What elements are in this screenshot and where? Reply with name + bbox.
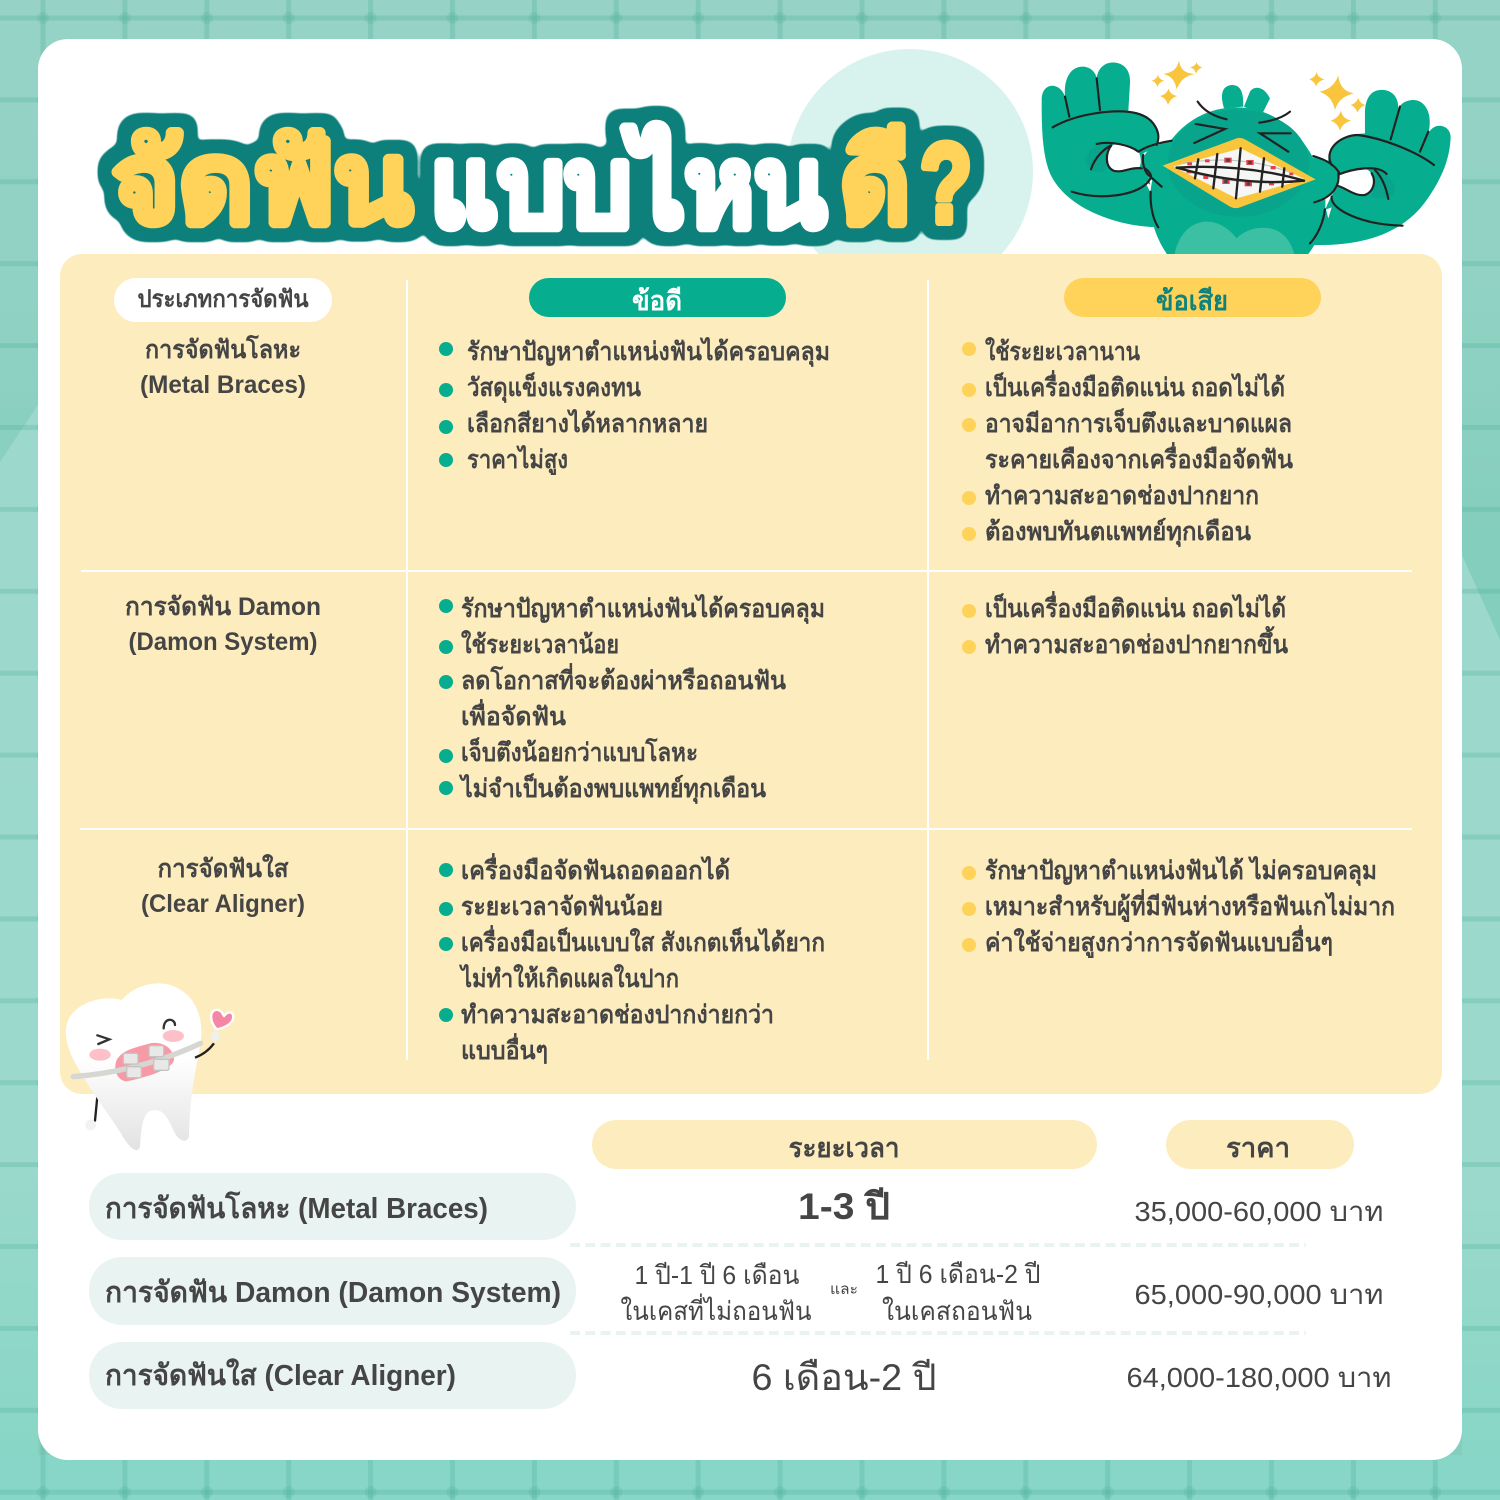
pros list: clear aligner: แบบอื่นๆ xyxy=(461,1033,548,1065)
duration: damon: และ xyxy=(830,1281,858,1298)
header: duration xyxy=(592,1120,1097,1169)
title xyxy=(112,121,972,250)
row label: clear aligner: (Clear Aligner) xyxy=(141,890,305,918)
cons list: metal: ระคายเคืองจากเครื่องมือจัดฟัน xyxy=(985,442,1293,474)
pros list: clear aligner: ทำความสะอาดช่องปากง่ายกว่า xyxy=(461,1001,774,1029)
title: ? xyxy=(920,121,972,246)
row pill: damon xyxy=(89,1257,576,1325)
row label: damon xyxy=(125,593,321,656)
pros list: metal: รักษาปัญหาตำแหน่งฟันได้ครอบคลุม xyxy=(467,336,830,368)
eyes xyxy=(1053,78,1434,243)
pros list: damon: ใช้ระยะเวลาน้อย xyxy=(461,629,619,659)
top knot xyxy=(1222,85,1243,108)
header: type of braces xyxy=(114,278,332,322)
pros list: damon xyxy=(439,593,825,805)
row label: metal braces: (Metal Braces) xyxy=(140,371,306,399)
body xyxy=(1150,107,1325,258)
title: จัดฟัน xyxy=(112,121,412,246)
cons list: metal: อาจมีอาการเจ็บตึงและบาดแผล xyxy=(985,408,1292,438)
row label: clear aligner xyxy=(141,853,305,918)
row label: metal braces: การจัดฟันโลหะ xyxy=(145,334,301,364)
cons list: damon: ทำความสะอาดช่องปากยากขึ้น xyxy=(985,625,1288,659)
hand shadows xyxy=(1085,143,1108,172)
pros list: damon: เจ็บตึงน้อยกว่าแบบโลหะ xyxy=(461,737,698,767)
row label: damon: (Damon System) xyxy=(128,628,318,656)
row label: metal braces xyxy=(140,334,306,399)
decorative circle behind title xyxy=(787,49,1033,295)
cons list: clear aligner: รักษาปัญหาตำแหน่งฟันได้ ไม่ครอบคลุม xyxy=(985,855,1377,887)
cons list: metal: ต้องพบทันตแพทย์ทุกเดือน xyxy=(985,517,1251,548)
row label: damon: การจัดฟัน Damon xyxy=(125,593,321,621)
row label: clear aligner: การจัดฟันใส xyxy=(158,853,289,883)
cons list: damon xyxy=(962,591,1288,659)
row pill: damon: การจัดฟัน Damon (Damon System) xyxy=(105,1277,561,1309)
right hand xyxy=(1310,90,1451,245)
header: price xyxy=(1166,1120,1354,1169)
header: cons xyxy=(1064,278,1321,317)
price: damon: 65,000-90,000 บาท xyxy=(1134,1279,1384,1310)
pros list: metal: ราคาไม่สูง xyxy=(467,444,568,476)
pros list: metal xyxy=(439,336,830,476)
duration: damon xyxy=(620,1259,1040,1326)
pros list: damon: ลดโอกาสที่จะต้องผ่าหรือถอนฟัน xyxy=(461,663,786,695)
cons list: clear aligner: เหมาะสำหรับผู้ที่มีฟันห่างหรือฟันเกไม่มาก xyxy=(985,889,1395,923)
sparkles xyxy=(1151,61,1365,131)
face shade xyxy=(1168,110,1309,217)
header: pros: ข้อดี xyxy=(632,286,682,316)
cons list: damon: เป็นเครื่องมือติดแน่น ถอดไม่ได้ xyxy=(985,591,1286,623)
duration: damon: ในเคสที่ไม่ถอนฟัน xyxy=(620,1293,812,1326)
hand outlines right xyxy=(1329,135,1434,165)
duration: damon: 1 ปี 6 เดือน-2 ปี xyxy=(876,1259,1040,1289)
illustration: tooth mascot xyxy=(66,983,233,1150)
pros list: clear aligner: ระยะเวลาจัดฟันน้อย xyxy=(461,893,663,921)
pros list: clear aligner: เครื่องมือเป็นแบบใส สังเกตเห็นได้ยาก xyxy=(461,925,825,957)
cons list: metal xyxy=(962,336,1293,548)
header: pros xyxy=(529,278,786,317)
price: clear: 64,000-180,000 บาท xyxy=(1126,1362,1392,1393)
pros list: clear aligner xyxy=(439,853,825,1065)
row pill: clear: การจัดฟันใส (Clear Aligner) xyxy=(105,1358,456,1392)
cons list: metal: ใช้ระยะเวลานาน xyxy=(985,336,1140,366)
pros list: metal: วัสดุแข็งแรงคงทน xyxy=(467,372,641,404)
pros list: damon: ไม่จำเป็นต้องพบแพทย์ทุกเดือน xyxy=(458,773,766,805)
cons list: metal: ทำความสะอาดช่องปากยาก xyxy=(985,482,1259,510)
pros list: clear aligner: ไม่ทำให้เกิดแผลในปาก xyxy=(458,963,679,993)
duration: damon: 1 ปี-1 ปี 6 เดือน xyxy=(634,1260,800,1290)
row pill: metal: การจัดฟันโลหะ (Metal Braces) xyxy=(105,1190,488,1225)
pros list: damon: เพื่อจัดฟัน xyxy=(461,699,566,731)
left hand xyxy=(1042,63,1158,227)
hand outlines left xyxy=(1053,111,1158,145)
header: cons: ข้อเสีย xyxy=(1156,286,1228,316)
holes in hands xyxy=(1106,144,1141,171)
row pill: clear xyxy=(89,1342,576,1409)
header: duration: ระยะเวลา xyxy=(788,1133,900,1163)
title: ดี xyxy=(840,121,910,246)
title: แบบไหน xyxy=(430,124,826,250)
illustration: green character with braces xyxy=(1042,61,1451,258)
duration: metal: 1-3 ปี xyxy=(798,1186,890,1227)
row pill: metal xyxy=(89,1173,576,1240)
pros list: clear aligner: เครื่องมือจัดฟันถอดออกได้ xyxy=(461,853,730,885)
header: type of braces: ประเภทการจัดฟัน xyxy=(138,286,309,313)
panel: comparison table xyxy=(60,254,1442,1094)
pros list: metal: เลือกสียางได้หลากหลาย xyxy=(467,408,708,438)
duration: clear: 6 เดือน-2 ปี xyxy=(752,1357,936,1398)
pros list: damon: รักษาปัญหาตำแหน่งฟันได้ครอบคลุม xyxy=(461,593,825,625)
cons list: metal: เป็นเครื่องมือติดแน่น ถอดไม่ได้ xyxy=(985,370,1285,402)
belly xyxy=(1174,222,1294,254)
cons list: clear aligner xyxy=(962,855,1395,959)
mouth xyxy=(1163,138,1316,208)
cons list: clear aligner: ค่าใช้จ่ายสูงกว่าการจัดฟันแบบอื่นๆ xyxy=(985,925,1333,959)
price: metal: 35,000-60,000 บาท xyxy=(1134,1196,1384,1227)
duration: damon: ในเคสถอนฟัน xyxy=(882,1296,1032,1326)
header: price: ราคา xyxy=(1226,1133,1290,1163)
